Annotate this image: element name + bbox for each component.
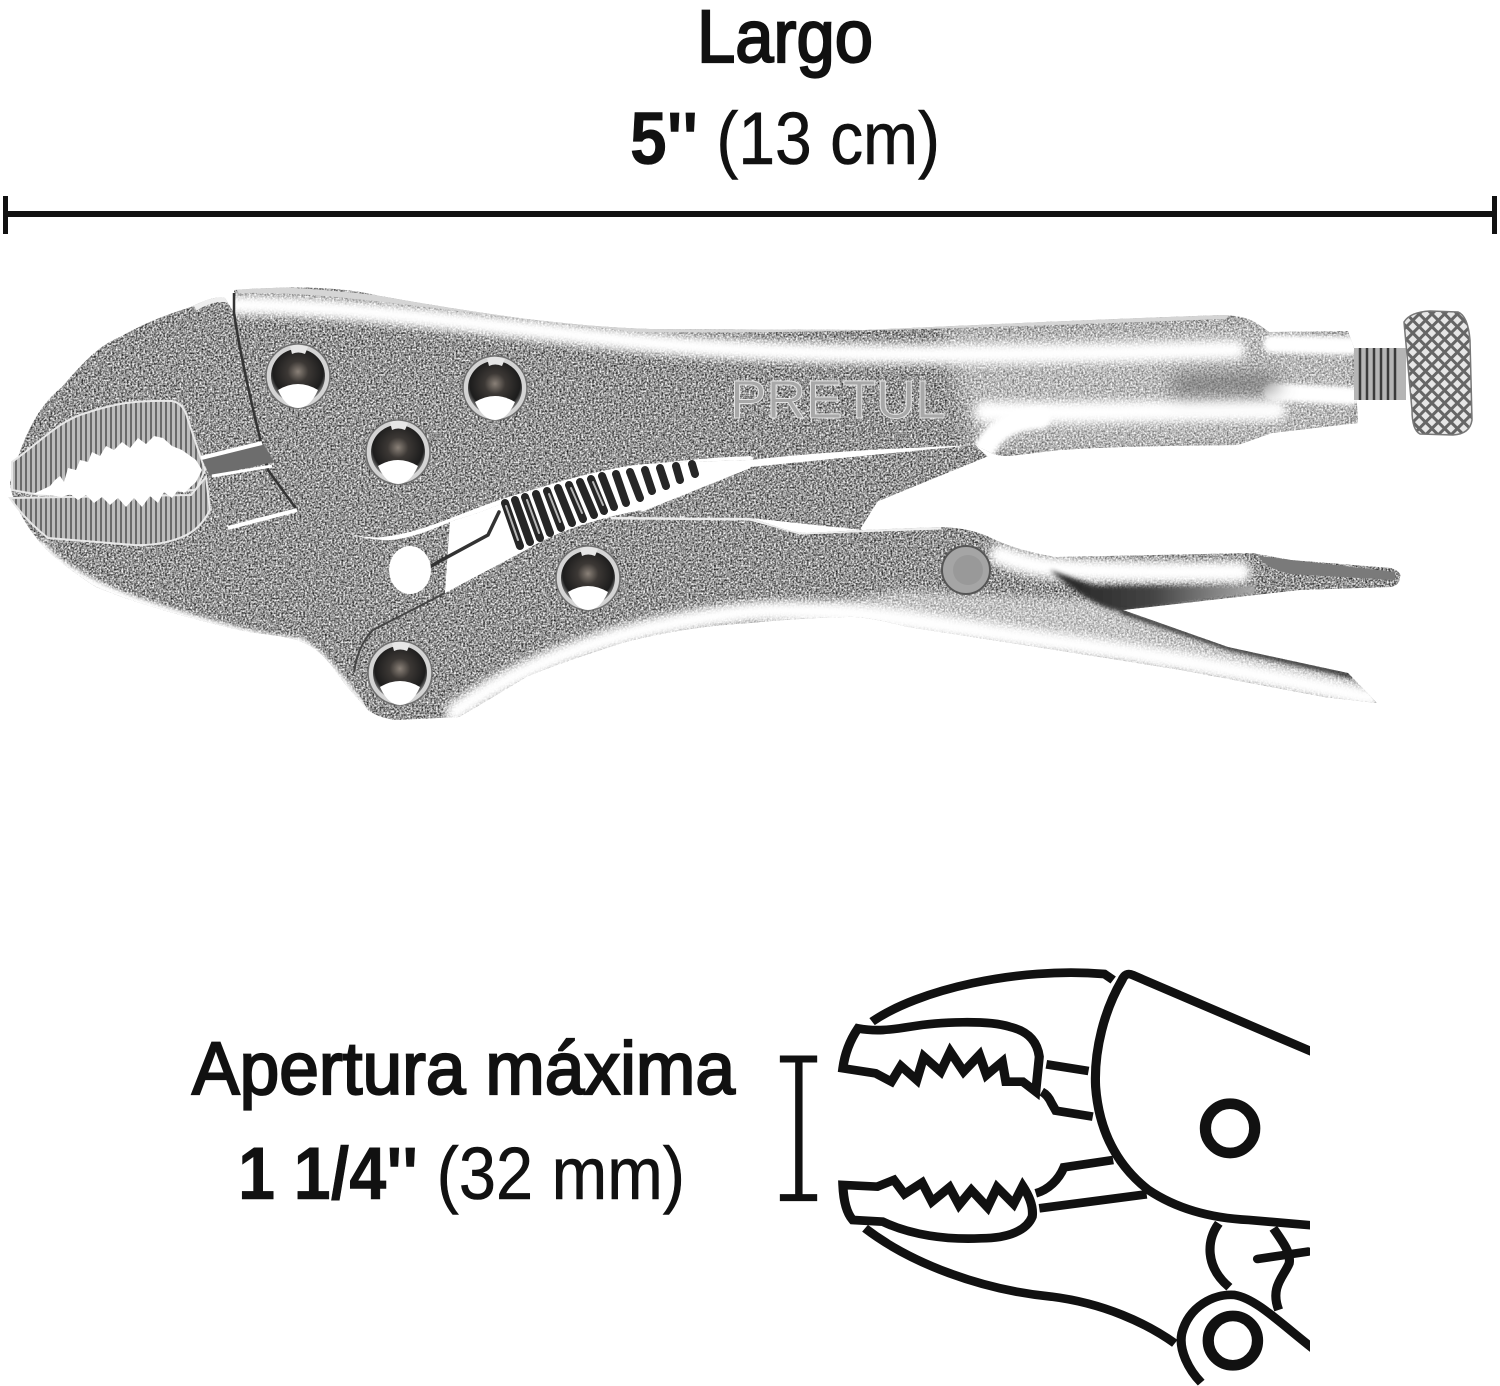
locking pliers photo	[10, 288, 1472, 720]
lower handle	[354, 517, 1400, 720]
spring curves	[1210, 1223, 1289, 1310]
upper jaw	[843, 1022, 1039, 1092]
middle link	[608, 445, 989, 530]
length dimension line	[3, 196, 1497, 234]
heading: largo	[630, 0, 940, 180]
jaw diagram	[780, 973, 1316, 1383]
rivet 3	[366, 420, 430, 484]
spring	[426, 464, 695, 569]
lower neck lines	[1036, 1160, 1147, 1208]
opening bracket	[780, 1059, 817, 1198]
rivet 1	[266, 344, 330, 408]
serrated upper jaw	[12, 401, 205, 495]
jaw opening	[33, 436, 202, 507]
upper lever	[234, 288, 1360, 540]
rivet 5	[368, 641, 432, 705]
serrated lower jaw	[10, 477, 210, 545]
lower pivot ring	[1208, 1316, 1258, 1365]
jaw slot	[201, 443, 297, 528]
lever outline	[1095, 974, 1316, 1226]
lower outer arc	[865, 1228, 1175, 1343]
label: Apertura máxima: Apertura máxima	[192, 1027, 736, 1110]
rivet 2	[463, 356, 527, 420]
jaw body	[10, 297, 450, 712]
value: 1 1/4 inches 32 mm: 1 1/4'' (32 mm)	[238, 1132, 685, 1215]
PRETUL stamp: PRETUL	[730, 370, 946, 430]
knurled knob	[1404, 311, 1472, 435]
body hole	[389, 546, 431, 594]
value: 5 inches 13 cm: 5'' (13 cm)	[630, 97, 940, 180]
spring bar	[1258, 1252, 1308, 1259]
handle pivot	[942, 546, 990, 594]
spring window	[445, 460, 750, 593]
lower link	[1181, 1295, 1316, 1383]
lower handle edge line	[354, 593, 445, 672]
lower jaw	[843, 1180, 1032, 1239]
upper outer arc	[872, 973, 1113, 1022]
threaded screw	[1354, 348, 1406, 400]
upper neck lines	[1042, 1064, 1093, 1117]
link edge highlights	[641, 458, 989, 530]
rivet 4	[556, 546, 620, 610]
lever edge line	[234, 293, 297, 510]
upper pivot ring	[1205, 1104, 1255, 1153]
heading: apertura maxima	[192, 1027, 736, 1215]
